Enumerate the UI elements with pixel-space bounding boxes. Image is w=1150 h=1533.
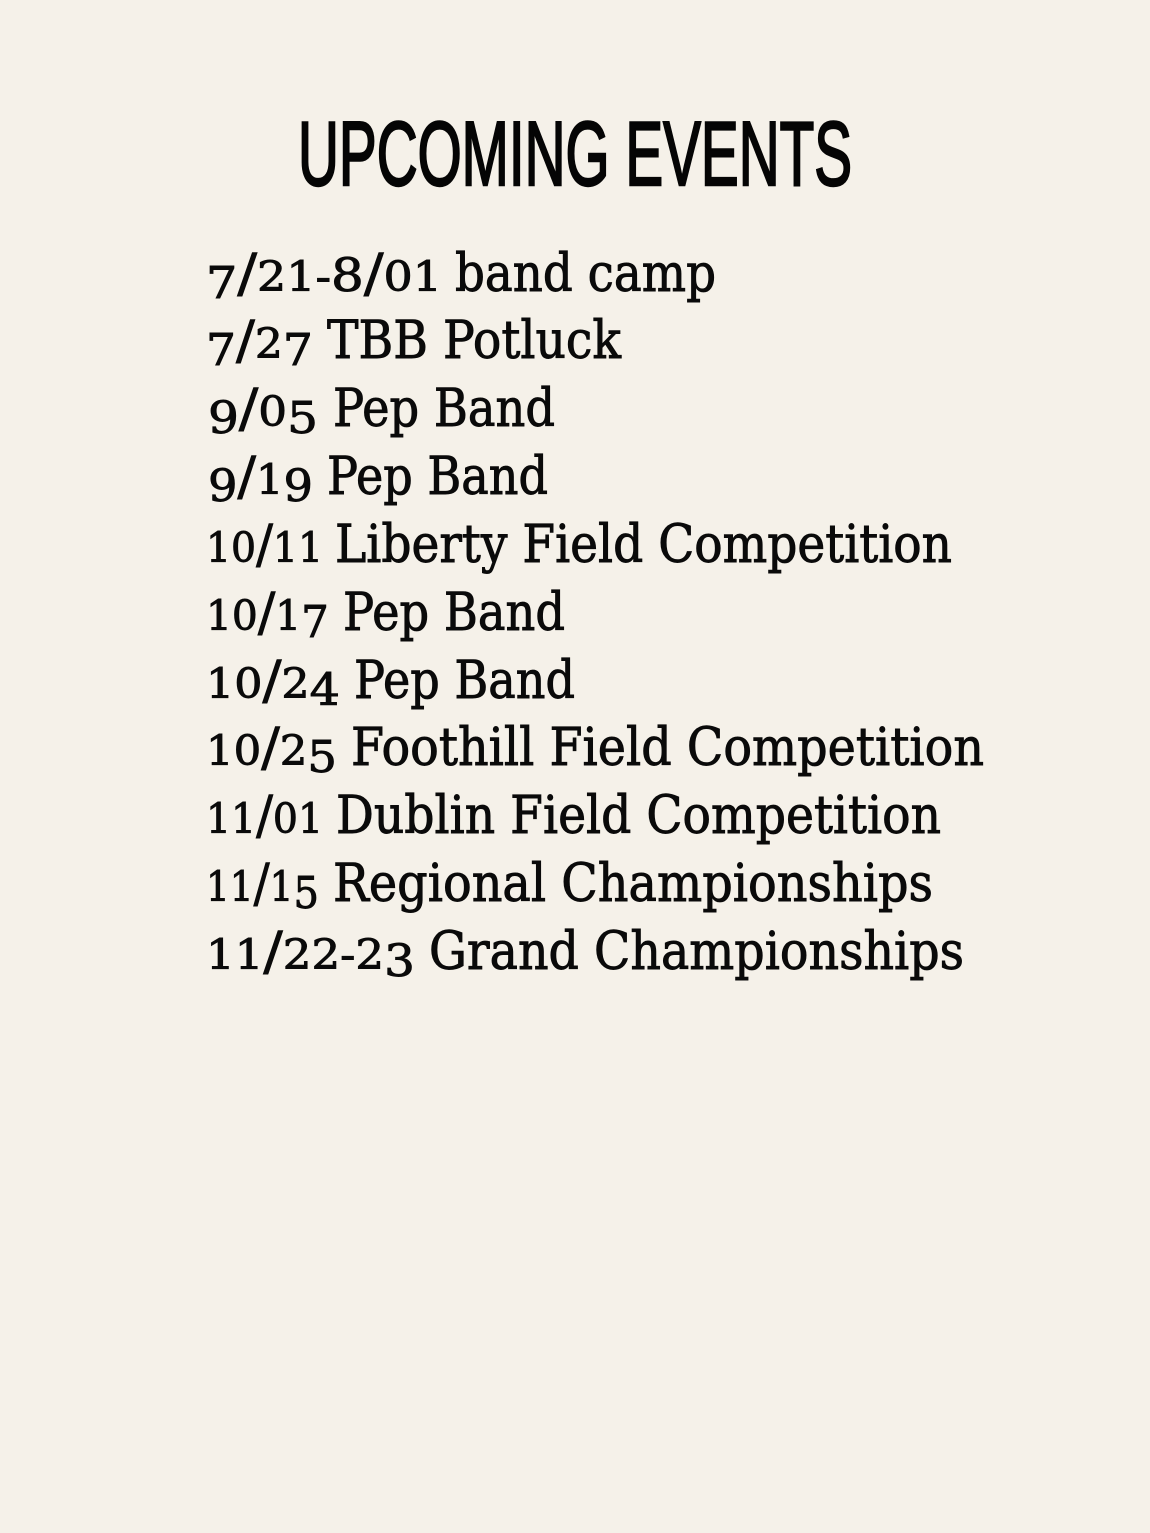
- event: Regional Championships: 11/15: [206, 854, 319, 919]
- event: Pep Band 9/19: 9/19: [208, 447, 313, 512]
- event: Pep Band 10/24: [206, 651, 575, 716]
- event: Pep Band 10/24: Pep Band: [354, 651, 575, 711]
- event list: [206, 244, 984, 987]
- event: Regional Championships: Regional Championships: [333, 854, 933, 914]
- event: TBB Potluck: 7/27: [206, 311, 313, 376]
- event: Pep Band 10/17: 10/17: [206, 583, 329, 648]
- event: Foothill Field Competition: 10/25: [206, 718, 337, 783]
- event: Pep Band 9/19: [208, 447, 548, 512]
- event: Liberty Field Competition: 10/11: [206, 515, 323, 575]
- event: Dublin Field Competition: Dublin Field Competition: [336, 786, 941, 846]
- event: band camp: 7/21-8/01: [206, 244, 442, 309]
- event: Pep Band 9/05: [208, 379, 555, 444]
- event: TBB Potluck: [206, 311, 621, 376]
- event: Grand Championships: Grand Championships: [429, 922, 964, 982]
- event: band camp: band camp: [455, 244, 716, 304]
- event: Pep Band 10/17: Pep Band: [343, 583, 565, 643]
- event: Pep Band 9/05: Pep Band: [333, 379, 555, 439]
- event: Pep Band 10/17: [206, 583, 565, 648]
- event: Grand Championships: 11/22-23: [206, 922, 415, 987]
- event: TBB Potluck: TBB Potluck: [327, 311, 621, 371]
- event: band camp: [206, 244, 716, 309]
- event: Dublin Field Competition: 11/01: [206, 786, 323, 846]
- event: Pep Band 10/24: 10/24: [206, 651, 340, 716]
- event: Liberty Field Competition: Liberty Field Competition: [335, 515, 952, 575]
- event: Foothill Field Competition: Foothill Field Competition: [351, 718, 984, 778]
- event: Pep Band 9/05: 9/05: [208, 379, 318, 444]
- event: Pep Band 9/19: Pep Band: [327, 447, 548, 507]
- event: Grand Championships: [206, 922, 964, 987]
